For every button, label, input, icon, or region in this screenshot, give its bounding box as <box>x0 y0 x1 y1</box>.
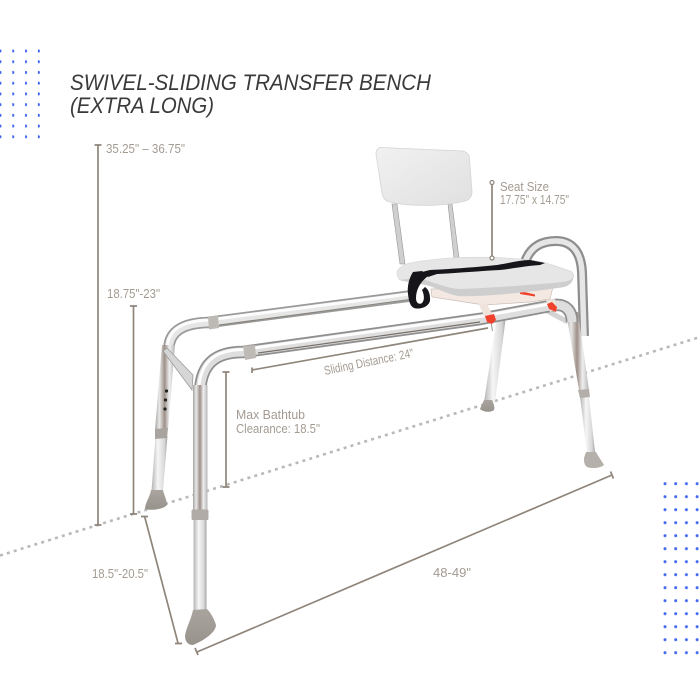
title: SWIVEL-SLIDING TRANSFER BENCH <box>70 70 431 95</box>
dimension: length: 48-49" <box>433 566 471 580</box>
decorative dot grid: top left <box>0 46 42 142</box>
far left leg collar <box>155 428 168 439</box>
far left foot <box>145 490 167 510</box>
near rail <box>198 303 572 395</box>
dimension: length <box>195 472 614 655</box>
right near leg <box>566 312 604 468</box>
near left leg <box>185 385 216 645</box>
title: (EXTRA LONG) <box>70 93 214 118</box>
arm rest <box>525 241 584 336</box>
far rail collar <box>208 316 219 330</box>
dimension: overall height: 35.25" – 36.75" <box>106 142 185 156</box>
dimension: seat height <box>107 287 160 514</box>
far rail <box>168 294 410 347</box>
near rail collar <box>243 345 256 360</box>
dimension: depth <box>92 516 182 644</box>
dimension: max bathtub clearance: Max Bathtub <box>236 408 305 422</box>
seat back <box>376 148 472 205</box>
red handle: center <box>520 291 535 296</box>
dimension: seat height: 18.75"-23" <box>107 287 160 301</box>
decorative dot grid: bottom right <box>660 477 700 659</box>
bench: chrome frame, rear parts <box>145 294 568 510</box>
dimension: sliding distance <box>252 328 488 378</box>
rear cross tube <box>538 306 568 322</box>
far right leg <box>484 316 506 402</box>
near left foot <box>185 609 216 645</box>
dimension: max bathtub clearance: Clearance: 18.5" <box>236 422 320 436</box>
seat back posts <box>392 204 459 264</box>
title <box>70 70 431 118</box>
red handle: front <box>485 314 496 324</box>
far left leg <box>155 345 175 430</box>
dimension: seat size <box>490 180 569 260</box>
seat <box>397 257 574 296</box>
dimension: seat size: 17.75" x 14.75" <box>500 193 569 207</box>
near left leg collar <box>192 510 208 520</box>
seat mechanism <box>431 287 557 331</box>
dimension: seat size: Seat Size <box>500 180 549 194</box>
far left leg holes <box>163 389 168 411</box>
dimension: sliding distance: Sliding Distance: 24" <box>323 346 415 378</box>
far right foot <box>480 400 494 412</box>
dimension: depth: 18.5"-20.5" <box>92 567 148 581</box>
floor line <box>0 337 700 556</box>
seat strap <box>408 260 545 309</box>
cross brace <box>163 348 193 390</box>
red handle: right <box>547 302 557 312</box>
dimension: overall height <box>94 142 185 525</box>
dimension: max bathtub clearance <box>222 372 320 487</box>
